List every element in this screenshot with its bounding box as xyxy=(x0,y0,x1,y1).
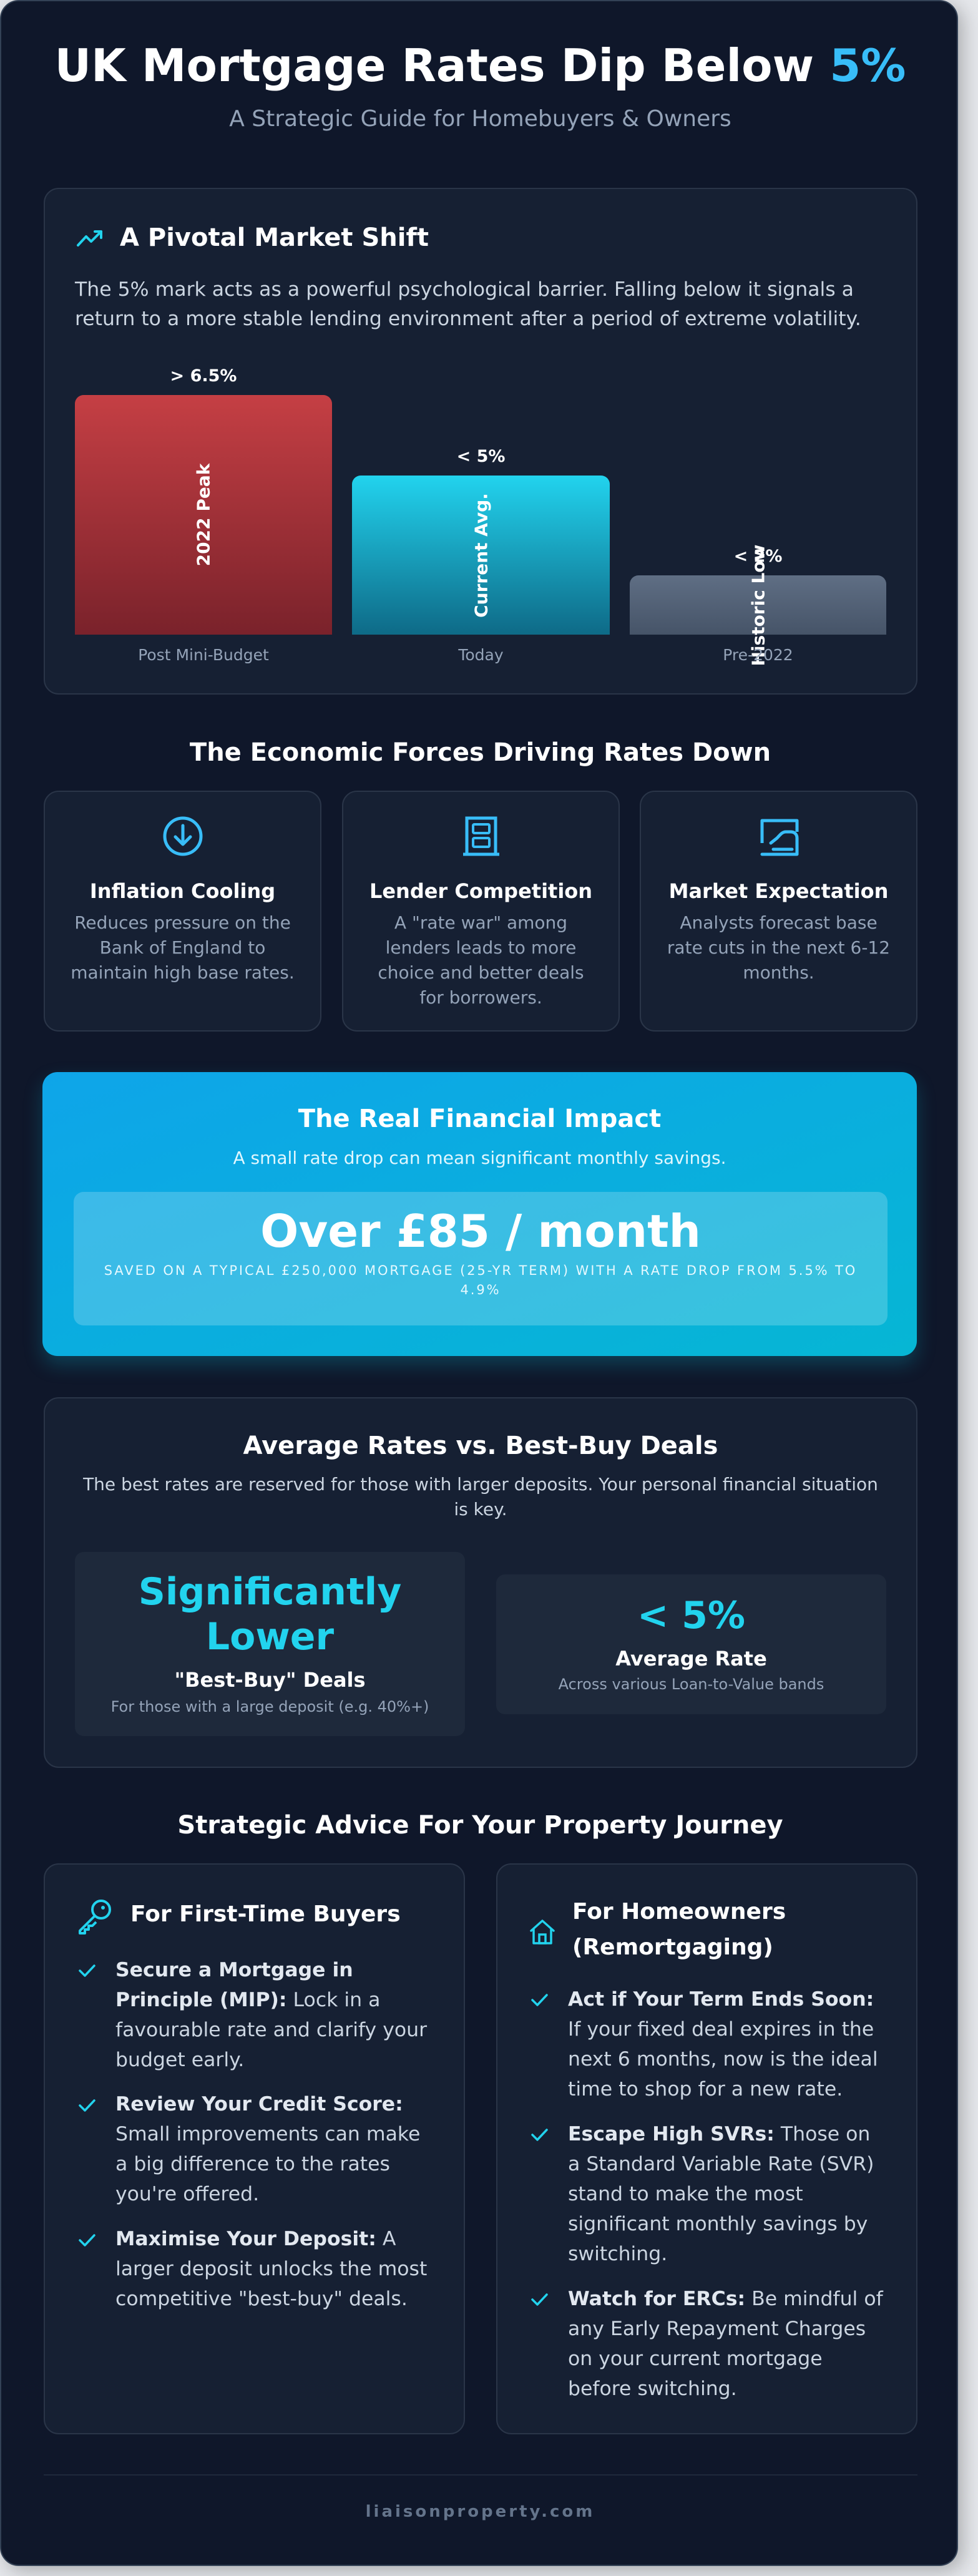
icon: trending up xyxy=(76,230,102,247)
bar: today: Current Avg. xyxy=(471,493,491,617)
bar: today: < 5% xyxy=(457,447,505,466)
bar chart: Pre-2022 xyxy=(723,646,793,664)
icon: arrow down circle xyxy=(164,816,202,856)
bar: post mini-budget: > 6.5% xyxy=(170,366,237,386)
icon: hand with money xyxy=(760,819,799,856)
bar: pre-2022 xyxy=(630,544,886,666)
list: buyer tips: Maximise Your Deposit: A larger deposit unlocks the most competitive "best-buy" deals. xyxy=(115,2228,427,2310)
bar: pre-2022: Historic Low xyxy=(748,544,768,666)
box: average rate: Average Rate xyxy=(615,1647,767,1671)
bar: today xyxy=(352,447,610,635)
panel: inflation cooling xyxy=(44,791,321,1032)
panel: homeowners xyxy=(496,1863,917,2434)
list: buyer tips xyxy=(79,1959,427,2310)
panel: first-time buyers: For First-Time Buyers xyxy=(130,1901,401,1927)
panel: market expectation: Analysts forecast base rate cuts in the next 6-12 months. xyxy=(667,912,890,983)
panel: lender competition: A "rate war" among lenders leads to more choice and better deals for borrowers. xyxy=(378,912,584,1008)
bar chart xyxy=(75,366,886,666)
bar: post mini-budget xyxy=(75,366,332,635)
list: buyer tips: Review Your Credit Score: Small improvements can make a big difference to the rates you're offered. xyxy=(115,2093,420,2205)
x-axis labels: Post Mini-Budget xyxy=(138,646,269,664)
panel: real financial impact: A small rate drop can mean significant monthly savings. xyxy=(233,1148,726,1168)
callout: savings: SAVED ON A TYPICAL £250,000 MORTGAGE (25-YR TERM) WITH A RATE DROP FROM 5.5% TO 4.9% xyxy=(104,1263,857,1297)
heading: strategic advice: Strategic Advice For Your Property Journey xyxy=(177,1811,783,1840)
callout: savings: Over £85 / month xyxy=(260,1205,701,1257)
panel: real financial impact xyxy=(42,1072,917,1356)
bar chart: Today xyxy=(458,646,504,664)
panel: lender competition xyxy=(342,791,620,1032)
bar: pre-2022: < 2% xyxy=(734,547,782,566)
heading: economic forces: The Economic Forces Driving Rates Down xyxy=(190,738,771,767)
list: homeowner tips: Act if Your Term Ends Soon: If your fixed deal expires in the next 6 months, now is the ideal time to shop for a new rate. xyxy=(568,1988,878,2100)
panel: average vs best-buy: The best rates are reserved for those with larger deposits. Your personal financial situation is key. xyxy=(83,1474,878,1520)
heading: A Pivotal Market Shift xyxy=(120,223,429,252)
box: average rate: Across various Loan-to-Value bands xyxy=(559,1676,824,1693)
bar: post mini-budget: 2022 Peak xyxy=(193,464,213,566)
panel: real financial impact: The Real Financial Impact xyxy=(298,1105,661,1133)
subtitle: A Strategic Guide for Homebuyers & Owners xyxy=(229,106,731,132)
list: buyer tips: Secure a Mortgage in Principle (MIP): Lock in a favourable rate and clarify your budget early. xyxy=(115,1959,427,2071)
panel: lender competition: Lender Competition xyxy=(369,879,592,903)
box: average rate: < 5% xyxy=(637,1594,745,1637)
box: best-buy: For those with a large deposit (e.g. 40%+) xyxy=(111,1698,429,1715)
panel: first-time buyers xyxy=(44,1863,465,2434)
panel: pivotal market shift xyxy=(44,188,917,695)
footer: liaisonproperty.com xyxy=(366,2502,595,2521)
icon: building xyxy=(463,816,499,856)
panel: inflation cooling: Reduces pressure on the Bank of England to maintain high base rates. xyxy=(71,912,295,983)
panel: inflation cooling: Inflation Cooling xyxy=(90,879,275,903)
panel: homeowners: For Homeowners (Remortgaging) xyxy=(572,1899,786,1960)
text: description: The 5% mark acts as a powerful psychological barrier. Falling below it signals a return to a more stable lending environment after a period of extreme volatility. xyxy=(75,278,861,330)
panel: market expectation: Market Expectation xyxy=(669,879,888,903)
list: homeowner tips: Watch for ERCs: Be mindful of any Early Repayment Charges on your current mortgage before switching. xyxy=(568,2288,883,2400)
list: homeowner tips xyxy=(531,1988,884,2400)
list: homeowner tips: Escape High SVRs: Those on a Standard Variable Rate (SVR) stand to make the most significant monthly savings by switching. xyxy=(568,2123,874,2265)
panel: market expectation xyxy=(640,791,917,1032)
callout: savings xyxy=(74,1192,888,1325)
box: best-buy xyxy=(75,1552,465,1736)
box: best-buy: "Best-Buy" Deals xyxy=(174,1668,366,1692)
icon: key xyxy=(79,1900,111,1934)
box: best-buy: Significantly Lower xyxy=(139,1570,401,1659)
box: average rate xyxy=(496,1574,886,1714)
icon: house xyxy=(530,1920,555,1944)
title: UK Mortgage Rates Dip Below 5% xyxy=(55,39,906,92)
panel: average vs best-buy xyxy=(44,1397,917,1768)
panel: average vs best-buy: Average Rates vs. Best-Buy Deals xyxy=(243,1432,718,1460)
